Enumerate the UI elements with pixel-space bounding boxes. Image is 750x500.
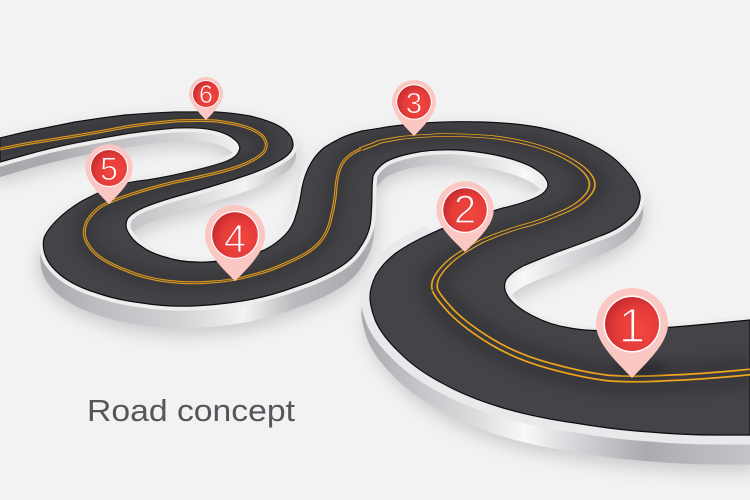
asphalt surface bbox=[0, 112, 750, 435]
road ground shadow bbox=[0, 124, 750, 466]
pin 1 bbox=[596, 288, 668, 378]
asphalt shading bbox=[0, 120, 750, 379]
road bbox=[0, 112, 750, 460]
pin 1: 1 bbox=[619, 300, 645, 353]
pin 6 bbox=[189, 77, 223, 120]
pin 2: 2 bbox=[454, 188, 476, 232]
road side walls bbox=[0, 113, 750, 460]
near road wide rim bbox=[370, 234, 750, 435]
pin 4 bbox=[205, 205, 265, 281]
pin 4: 4 bbox=[224, 217, 246, 261]
pin 5: 5 bbox=[100, 151, 118, 187]
road white rim bbox=[0, 112, 750, 435]
pin 6: 6 bbox=[199, 81, 213, 109]
pin 3: 3 bbox=[406, 88, 422, 120]
pin 2 bbox=[436, 181, 494, 252]
pin 3 bbox=[392, 80, 436, 136]
title: Road concept bbox=[87, 393, 295, 428]
near road outer wall bbox=[370, 236, 750, 456]
double yellow centre line bbox=[0, 120, 750, 379]
pin 5 bbox=[85, 144, 133, 204]
